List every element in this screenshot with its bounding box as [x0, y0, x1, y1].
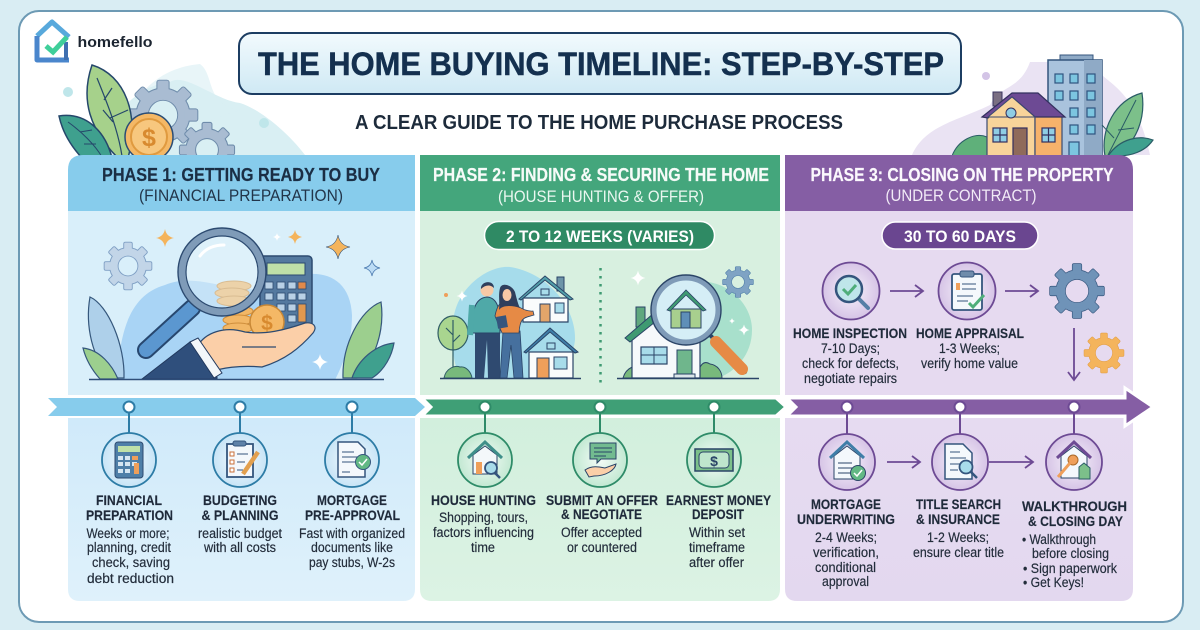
step: walkthrough and closing day	[1022, 434, 1127, 590]
phase 2 header: PHASE 2: FINDING & SECURING THE HOME	[433, 165, 769, 185]
step: earnest money deposit: Within set	[689, 525, 745, 540]
panel: phase 1 upper	[68, 155, 415, 395]
icon: large gear	[1050, 264, 1104, 318]
arrow	[989, 456, 1033, 468]
step: financial preparation: check, saving	[92, 555, 170, 570]
dotted divider	[599, 268, 602, 384]
step: mortgage pre-approval: PRE-APPROVAL	[305, 507, 400, 523]
step: mortgage underwriting: UNDERWRITING	[797, 511, 895, 527]
step: earnest money deposit: DEPOSIT	[692, 506, 744, 522]
step: budgeting and planning: with all costs	[203, 540, 276, 555]
panel: phase 1 lower	[68, 418, 415, 601]
illustration: couple and houses	[438, 267, 759, 378]
step: walkthrough and closing day: before closing	[1032, 546, 1109, 561]
illustration: magnifier, coins, calculator and hand	[83, 228, 394, 380]
step: mortgage pre-approval: documents like	[311, 540, 393, 555]
step: mortgage underwriting	[797, 434, 895, 589]
step: house hunting: HOUSE HUNTING	[431, 492, 536, 508]
title box: THE HOME BUYING TIMELINE: STEP-BY-STEP	[258, 46, 944, 82]
timeline nodes phase 1	[124, 402, 358, 433]
step: earnest money deposit: EARNEST MONEY	[666, 492, 772, 508]
illustration: house and tower top right	[912, 55, 1153, 156]
panel: phase 3 lower	[785, 418, 1133, 601]
panel: phase 2 lower	[420, 418, 780, 601]
step: walkthrough and closing day: • Walkthrough	[1022, 532, 1096, 547]
step: earnest money deposit: $	[710, 453, 718, 469]
step: submit an offer and negotiate: or countered	[567, 540, 637, 555]
step: home inspection: 7-10 Days;	[821, 341, 880, 356]
step: home inspection	[793, 262, 907, 386]
step: mortgage underwriting: MORTGAGE	[811, 496, 881, 512]
step: walkthrough and closing day: & CLOSING DAY	[1028, 513, 1124, 529]
duration pill: 30 to 60 days	[882, 222, 1038, 249]
step: house hunting: time	[471, 540, 495, 555]
step: title search and insurance	[913, 434, 1004, 560]
step: financial preparation: PREPARATION	[86, 507, 173, 523]
step: mortgage underwriting: approval	[822, 574, 869, 589]
phase 3 ribbon with arrowhead	[787, 388, 1153, 426]
phase 1 header: PHASE 1: GETTING READY TO BUY	[102, 165, 380, 185]
step: title search and insurance: 1-2 Weeks;	[927, 530, 989, 545]
arrow	[890, 285, 923, 297]
step: title search and insurance: ensure clear title	[913, 545, 1004, 560]
step: submit an offer and negotiate: Offer accepted	[561, 525, 642, 540]
step: earnest money deposit: timeframe	[689, 540, 745, 555]
step: earnest money deposit: after offer	[689, 555, 744, 570]
step: earnest money deposit	[666, 433, 772, 570]
step: mortgage pre-approval: pay stubs, W-2s	[309, 555, 395, 570]
phase 1 ribbon	[48, 398, 425, 416]
duration pill: 2 to 12 weeks	[484, 222, 714, 250]
step: financial preparation	[86, 433, 174, 586]
arrow	[887, 456, 920, 468]
step: financial preparation: FINANCIAL	[96, 492, 162, 508]
arrow down	[1068, 328, 1080, 380]
step: mortgage pre-approval: MORTGAGE	[317, 492, 387, 508]
step: title search and insurance: TITLE SEARCH	[916, 496, 1001, 512]
phase 1 header: (FINANCIAL PREPARATION)	[139, 186, 343, 205]
step: house hunting	[431, 433, 536, 555]
step: house hunting: Shopping, tours,	[439, 510, 528, 525]
step: home inspection: HOME INSPECTION	[793, 325, 907, 341]
step: submit an offer and negotiate: & NEGOTIATE	[561, 506, 642, 522]
phase 3 header: (UNDER CONTRACT)	[886, 186, 1036, 205]
phase 3 header: PHASE 3: CLOSING ON THE PROPERTY	[810, 165, 1114, 185]
step: mortgage underwriting: verification,	[813, 545, 879, 560]
icon: orange gear	[1084, 333, 1124, 373]
step: financial preparation: debt reduction	[87, 571, 174, 586]
phase 2 header	[420, 155, 780, 211]
step: budgeting and planning	[198, 433, 282, 555]
step: submit an offer and negotiate	[546, 433, 658, 555]
step: home appraisal: verify home value	[921, 356, 1018, 371]
step: title search and insurance: & INSURANCE	[916, 511, 1000, 527]
step: home appraisal	[916, 262, 1024, 371]
step: walkthrough and closing day: WALKTHROUGH	[1022, 498, 1127, 514]
illustration: leaves, gears and coin top left: $	[142, 124, 156, 152]
panel: phase 3 upper	[785, 155, 1133, 395]
step: submit an offer and negotiate: SUBMIT AN OFFER	[546, 492, 658, 508]
duration pill: 30 to 60 days: 30 TO 60 DAYS	[904, 227, 1016, 246]
timeline nodes phase 3	[842, 402, 1080, 434]
phase 2 ribbon	[422, 398, 786, 416]
step: mortgage underwriting: 2-4 Weeks;	[815, 530, 877, 545]
illustration: magnifier over house	[623, 267, 753, 378]
timeline arrow	[48, 388, 1153, 426]
subtitle: A CLEAR GUIDE TO THE HOME PURCHASE PROCESS	[355, 112, 843, 134]
logo: homefello: homefello	[78, 35, 153, 51]
step: financial preparation: Weeks or more;	[86, 526, 170, 541]
step: mortgage pre-approval	[299, 433, 405, 570]
step: walkthrough and closing day: • Get Keys!	[1023, 575, 1084, 590]
timeline nodes phase 2	[480, 402, 720, 433]
step: home appraisal: HOME APPRAISAL	[916, 325, 1024, 341]
step: mortgage pre-approval: Fast with organized	[299, 526, 405, 541]
arrow	[1005, 285, 1038, 297]
step: home appraisal: 1-3 Weeks;	[939, 341, 1000, 356]
step: home inspection: check for defects,	[802, 356, 899, 371]
duration pill: 2 to 12 weeks: 2 TO 12 WEEKS (VARIES)	[506, 227, 694, 246]
step: budgeting and planning: & PLANNING	[202, 507, 279, 523]
phase 1 header	[68, 155, 415, 211]
step: home inspection: negotiate repairs	[804, 371, 897, 386]
illustration: magnifier, coins, calculator and hand: $	[261, 312, 273, 335]
step: walkthrough and closing day: • Sign paperwork	[1023, 561, 1117, 576]
title box	[239, 33, 961, 94]
step: house hunting: factors influencing	[433, 525, 534, 540]
phase 2 header: (HOUSE HUNTING & OFFER)	[498, 187, 704, 206]
logo: homefello	[37, 22, 153, 60]
step: budgeting and planning: realistic budget	[198, 526, 282, 541]
step: financial preparation: planning, credit	[87, 540, 171, 555]
panel: phase 2 upper	[420, 155, 780, 395]
illustration: leaves, gears and coin top left	[59, 64, 305, 177]
phase 3 header	[785, 155, 1133, 211]
step: budgeting and planning: BUDGETING	[203, 492, 277, 508]
step: mortgage underwriting: conditional	[815, 560, 876, 575]
